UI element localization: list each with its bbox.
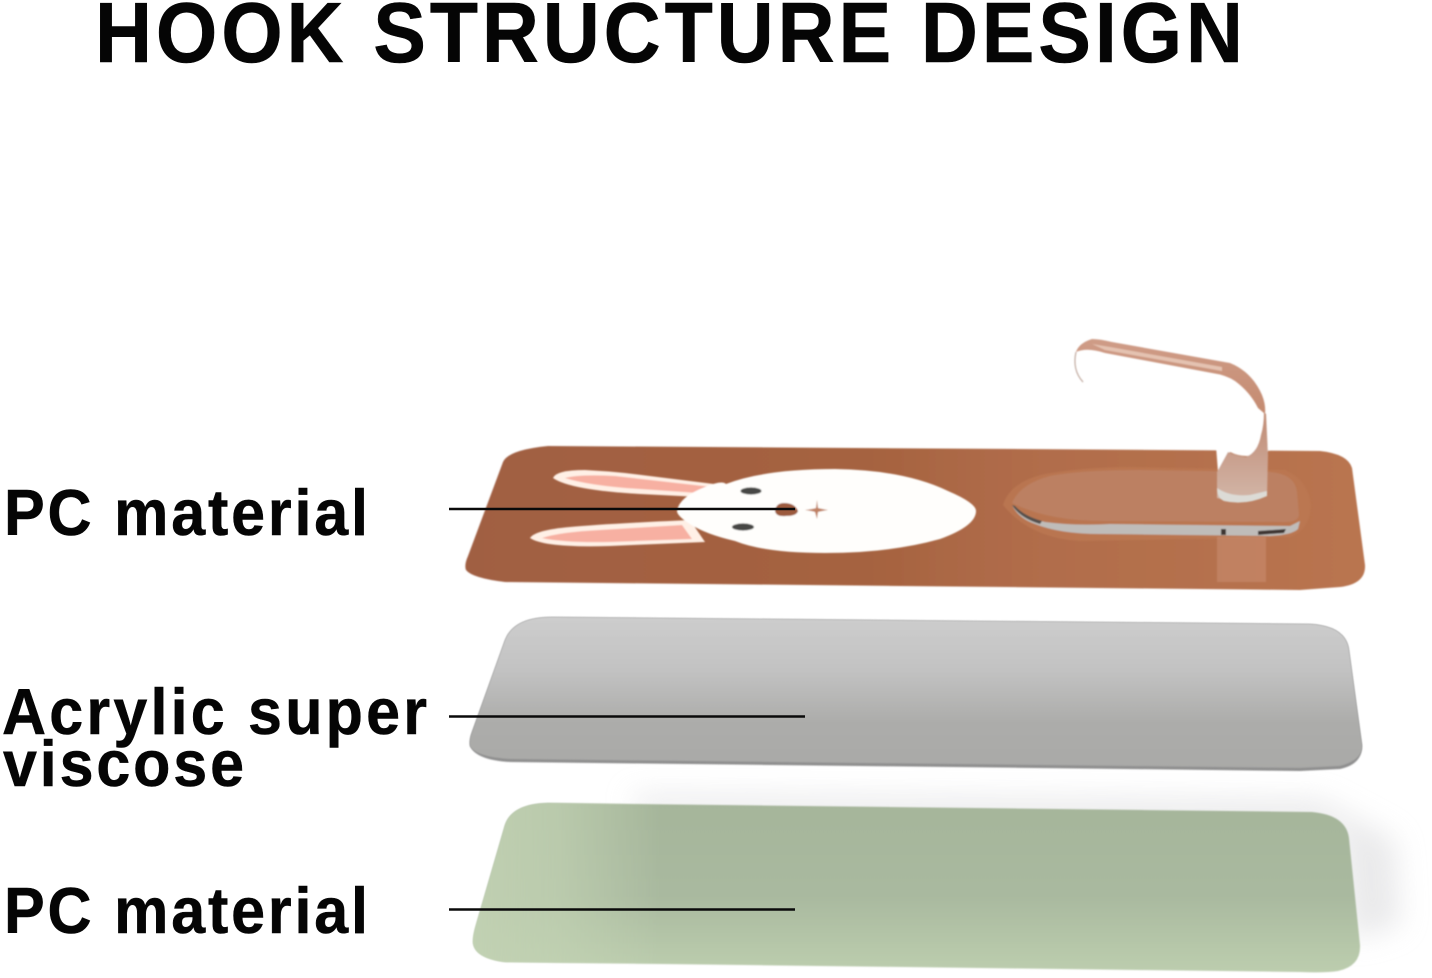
icon: transparent hook disc: [1003, 467, 1311, 582]
icon: rabbit head: [677, 469, 976, 553]
icon: nose: [775, 503, 798, 516]
label: acrylic super viscose: [2, 676, 427, 800]
leader line: top PC material: [449, 508, 795, 510]
label: bottom PC material: PC material: [4, 875, 368, 947]
icon: hook stem: [1217, 412, 1268, 502]
icon: rabbit: [530, 469, 976, 553]
panel: brown PC layer with rabbit: [465, 339, 1365, 590]
label: acrylic super viscose: viscose: [3, 728, 244, 800]
label: top PC material: PC material: [4, 477, 368, 549]
icon: mouth: [805, 500, 828, 519]
icon: hook notch: [1216, 446, 1268, 472]
icon: upper ear: [553, 470, 722, 497]
panel: green PC layer with shadow: [473, 795, 1400, 972]
icon: lower ear: [530, 520, 705, 546]
icon: eyes: [732, 487, 762, 531]
leader line: acrylic super viscose: [449, 715, 805, 718]
leader line: bottom PC material: [449, 908, 795, 911]
icon: disc edge: [1012, 505, 1300, 536]
label: acrylic super viscose: Acrylic super: [2, 676, 427, 748]
icon: hook arm: [1075, 339, 1268, 503]
panel: gray acrylic layer: [470, 617, 1362, 771]
icon: light reflection stripe: [1217, 537, 1266, 582]
